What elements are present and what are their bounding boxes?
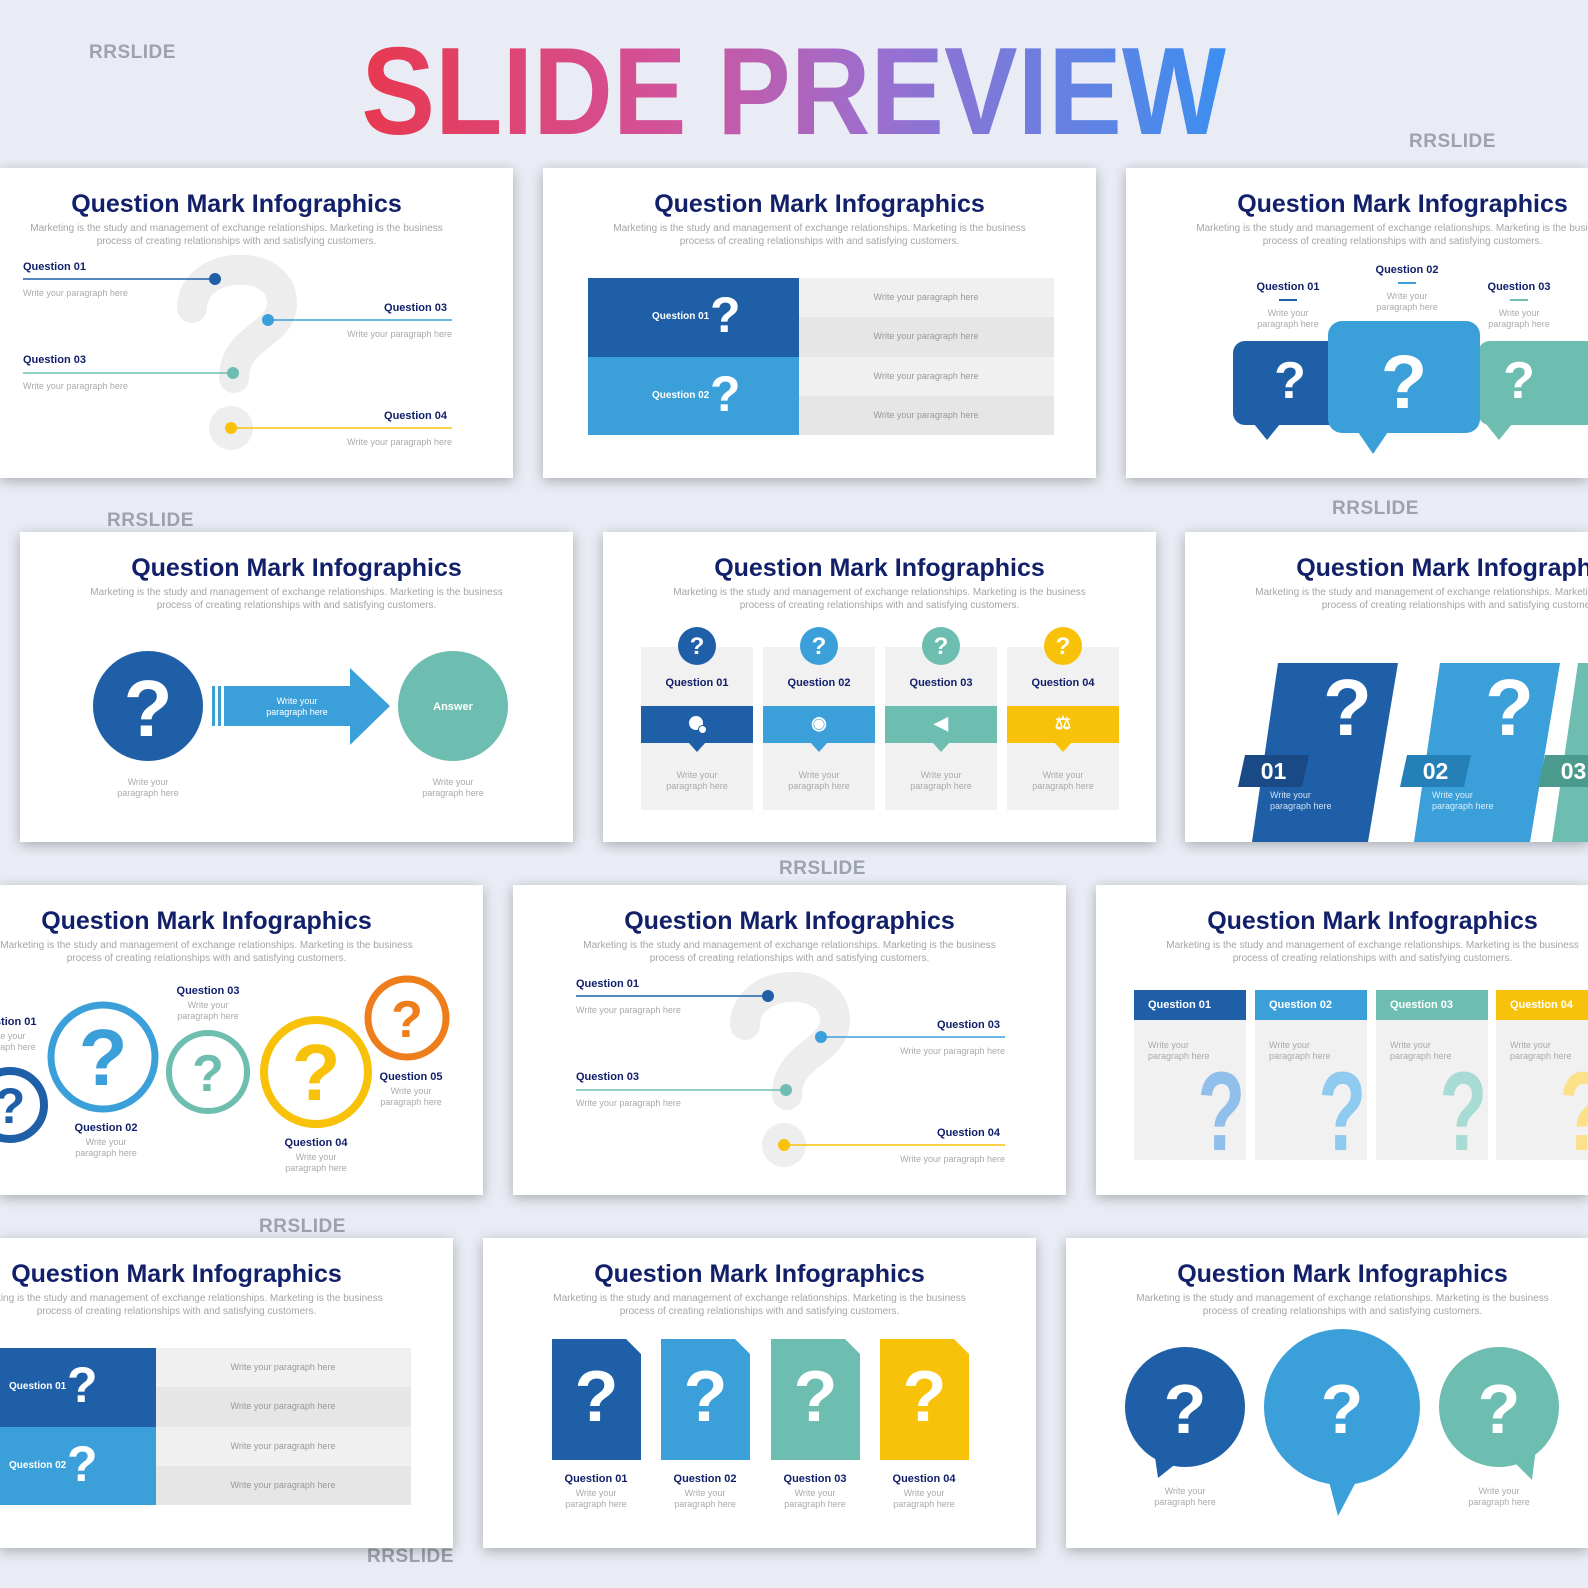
bar 01: ?: [1323, 663, 1372, 752]
panel: slide 3 speech boxes: paragraph here: [1488, 319, 1550, 329]
panel: slide 7 rings: Marketing is the study and management of exchange relationships. Marketing is the business: [0, 940, 413, 951]
panel: slide 9 header columns: Question Mark Infographics: [1207, 907, 1538, 935]
panel: slide 1 question lines: Question 03: [23, 354, 86, 366]
doc 3: ?: [794, 1357, 837, 1437]
column 3: Question 03: [1390, 999, 1453, 1011]
column 2: paragraph here: [788, 781, 850, 791]
panel: slide 7 rings: paragraph here: [75, 1148, 137, 1158]
column 1: ?: [690, 633, 704, 660]
watermark: RRSLIDE: [1332, 498, 1419, 519]
doc 3: paragraph here: [784, 1499, 846, 1509]
column 3: Write your: [1390, 1040, 1431, 1050]
panel: slide 7 rings: [0, 885, 483, 1195]
panel: slide 4 arrow answer: [20, 532, 573, 842]
column 4: Write your: [1043, 770, 1083, 780]
watermark: RRSLIDE: [259, 1216, 346, 1237]
icon: round speech bubbles: ?: [1164, 1370, 1206, 1448]
panel: slide 7 rings: paragraph here: [285, 1163, 347, 1173]
panel: slide 8 question lines: Question 04: [937, 1127, 1000, 1139]
watermark: RRSLIDE: [89, 42, 176, 63]
table: ?: [67, 1436, 98, 1492]
column 2: Question 02: [1269, 999, 1332, 1011]
panel: slide 12 round bubbles: Marketing is the study and management of exchange relationships. Marketing is the business: [1136, 1293, 1549, 1304]
panel: slide 1 question lines: Write your paragraph here: [23, 381, 128, 391]
chart: question arrow answer: Answer: [433, 701, 474, 713]
table: Write your paragraph here: [874, 371, 978, 381]
column 3: paragraph here: [1390, 1051, 1452, 1061]
panel: slide 1 question lines: Question 01: [23, 261, 86, 273]
panel: slide 1 question lines: Question 04: [384, 410, 447, 422]
doc 1: Write your: [576, 1488, 616, 1498]
bar 03: 03: [1561, 758, 1586, 784]
icon: round speech bubbles: ?: [1321, 1370, 1363, 1448]
chart: rings: ?: [391, 991, 423, 1049]
chart: question arrow answer: ?: [124, 664, 172, 753]
panel: slide 5 four columns: [603, 532, 1156, 842]
panel: slide 7 rings: process of creating relationships with and satisfying customers.: [67, 952, 346, 964]
column 3: ?: [934, 633, 948, 660]
table: Write your paragraph here: [874, 292, 978, 302]
panel: slide 10 table: [0, 1238, 453, 1548]
panel: slide 7 rings: paragraph here: [177, 1011, 239, 1021]
column 1: paragraph here: [666, 781, 728, 791]
panel: slide 1 question lines: Question 03: [384, 302, 447, 314]
bar 02: paragraph here: [1432, 801, 1494, 811]
column 3: Write your: [921, 770, 961, 780]
panel: slide 8 question lines: Write your paragraph here: [576, 1098, 681, 1108]
chart: rings: ?: [79, 1013, 127, 1102]
table: ?: [710, 287, 741, 343]
table: Question 01: [652, 311, 709, 322]
panel: slide 8 question lines: Question 03: [937, 1019, 1000, 1031]
watermark: RRSLIDE: [779, 858, 866, 879]
panel: slide 1 question lines: process of creating relationships with and satisfying customers.: [97, 236, 376, 246]
doc 3: Write your: [795, 1488, 835, 1498]
column 4: ⚖: [1055, 713, 1071, 733]
panel: slide 4 arrow answer: Marketing is the study and management of exchange relationships. Marketing is the business: [90, 587, 503, 598]
panel: slide 11 documents: [483, 1238, 1036, 1548]
panel: slide 5 four columns: Question Mark Infographics: [714, 554, 1045, 582]
chart: question arrow answer: [93, 651, 508, 761]
panel: slide 3 speech boxes: Write your: [1268, 308, 1308, 318]
icon: speech bubbles: ?: [1381, 340, 1427, 425]
column 2: [763, 627, 875, 810]
panel: slide 3 speech boxes: paragraph here: [1376, 302, 1438, 312]
chart: rings: ?: [192, 1045, 224, 1103]
doc 1: [552, 1339, 641, 1509]
watermark: RRSLIDE: [107, 510, 194, 531]
panel: slide 7 rings: Write your: [86, 1137, 126, 1147]
panel: slide 7 rings: Question 03: [177, 985, 239, 997]
panel: slide 12 round bubbles: paragraph here: [1468, 1497, 1530, 1507]
panel: slide 1 question lines: Write your paragraph here: [347, 437, 452, 447]
doc 2: ?: [684, 1357, 727, 1437]
panel: slide 4 arrow answer: paragraph here: [117, 788, 179, 798]
panel: slide 3 speech boxes: Question 02: [1376, 264, 1438, 276]
chart: rings: ?: [292, 1028, 340, 1117]
table: Question 01: [9, 1381, 66, 1392]
doc 3: Question 03: [784, 1473, 846, 1485]
bar 03: [1538, 663, 1588, 842]
panel: slide 3 speech boxes: Write your: [1499, 308, 1539, 318]
panel: slide 7 rings: paragraph here: [380, 1097, 442, 1107]
column 2: Question 02: [788, 677, 850, 689]
icon: speech bubbles: [1233, 321, 1588, 454]
doc 2: Question 02: [674, 1473, 736, 1485]
panel: slide 6 slanted bars: [1185, 532, 1588, 842]
bar 01: [1238, 663, 1398, 842]
panel: slide 9 header columns: Marketing is the study and management of exchange relationships. Marketing is the business: [1166, 940, 1579, 951]
chart: question arrow answer: paragraph here: [266, 707, 328, 717]
doc 1: ?: [574, 1357, 618, 1437]
panel: slide 1 question lines: Marketing is the study and management of exchange relationships. Marketing is the business: [30, 223, 443, 234]
icon: round speech bubbles: ?: [1478, 1370, 1520, 1448]
column 4: Question 04: [1032, 677, 1094, 689]
column 4: Question 04: [1510, 999, 1573, 1011]
column 3: [885, 627, 997, 810]
panel: slide 4 arrow answer: process of creating relationships with and satisfying customers.: [157, 600, 436, 610]
doc 2: paragraph here: [674, 1499, 736, 1509]
panel: slide 9 header columns: [1096, 885, 1588, 1195]
panel: slide 8 question lines: Marketing is the study and management of exchange relationships. Marketing is the business: [583, 940, 996, 951]
table: [588, 278, 1054, 435]
column 3: paragraph here: [910, 781, 972, 791]
table: ?: [67, 1357, 98, 1413]
table: Write your paragraph here: [231, 1480, 335, 1490]
column 4: [1496, 990, 1588, 1160]
bar 01: Write your: [1270, 790, 1311, 800]
panel: slide 4 arrow answer: Write your: [433, 777, 473, 787]
panel: slide 8 question lines: process of creating relationships with and satisfying customers.: [650, 952, 929, 964]
doc 4: paragraph here: [893, 1499, 955, 1509]
panel: slide 8 question lines: Question Mark Infographics: [624, 907, 955, 935]
doc 4: ?: [902, 1357, 946, 1437]
watermark: RRSLIDE: [367, 1546, 454, 1567]
panel: slide 7 rings: Question 05: [380, 1071, 442, 1083]
column 3: ◀: [934, 713, 948, 733]
icon: speech bubbles: ?: [1503, 352, 1535, 410]
column 1: paragraph here: [1148, 1051, 1210, 1061]
panel: slide 8 question lines: Write your paragraph here: [900, 1046, 1005, 1056]
table: Question 02: [9, 1460, 66, 1471]
panel: slide 8 question lines: Write your paragraph here: [900, 1154, 1005, 1164]
table: Write your paragraph here: [874, 331, 978, 341]
panel: slide 8 question lines: Question 01: [576, 978, 639, 990]
panel: slide 3 speech boxes: Write your: [1387, 291, 1427, 301]
column 1: [1134, 990, 1246, 1160]
bar 02: ?: [1485, 663, 1534, 752]
watermark: RRSLIDE: [1409, 131, 1496, 152]
panel: slide 8 question lines: Write your paragraph here: [576, 1005, 681, 1015]
table: Write your paragraph here: [231, 1401, 335, 1411]
doc 2: Write your: [685, 1488, 725, 1498]
panel: slide 4 arrow answer: Question Mark Infographics: [131, 554, 462, 582]
panel: slide 7 rings: Question 04: [285, 1137, 347, 1149]
panel: slide 8 question lines: Question 03: [576, 1071, 639, 1083]
panel: slide 12 round bubbles: Question Mark Infographics: [1177, 1260, 1508, 1288]
column 2: Write your: [1269, 1040, 1310, 1050]
panel: slide 1 question lines: Write your paragraph here: [23, 288, 128, 298]
column 1: Write your: [677, 770, 717, 780]
chart: question arrow answer: Write your: [277, 696, 317, 706]
panel: slide 2 table: Marketing is the study and management of exchange relationships. Marketing is the business: [613, 223, 1026, 234]
panel: slide 8 question lines: [513, 885, 1066, 1195]
panel: slide 2 table: process of creating relationships with and satisfying customers.: [680, 236, 959, 246]
column 1: Question 01: [666, 677, 728, 689]
table: [0, 1348, 411, 1505]
chart: rings: [0, 976, 450, 1143]
column 4: paragraph here: [1510, 1051, 1572, 1061]
panel: slide 3 speech boxes: Question 03: [1488, 281, 1550, 293]
panel: slide 7 rings: Write your: [296, 1152, 336, 1162]
panel: slide 5 four columns: process of creating relationships with and satisfying customers.: [740, 600, 1019, 610]
panel: slide 3 speech boxes: Question 01: [1257, 281, 1319, 293]
column 2: paragraph here: [1269, 1051, 1331, 1061]
panel: slide 9 header columns: process of creating relationships with and satisfying customers.: [1233, 952, 1512, 964]
column 4: Write your: [1510, 1040, 1551, 1050]
column 3: Question 03: [910, 677, 972, 689]
icon: round speech bubbles: [1125, 1329, 1559, 1516]
panel: slide 12 round bubbles: paragraph here: [1154, 1497, 1216, 1507]
doc 4: Write your: [904, 1488, 944, 1498]
panel: slide 3 speech boxes: paragraph here: [1257, 319, 1319, 329]
panel: slide 12 round bubbles: [1066, 1238, 1588, 1548]
doc 1: Question 01: [565, 1473, 627, 1485]
panel: slide 1 question lines: [0, 168, 513, 478]
panel: slide 3 speech boxes: [1126, 168, 1588, 478]
table: Question 02: [652, 390, 709, 401]
bar 02: Write your: [1432, 790, 1473, 800]
panel: slide 4 arrow answer: paragraph here: [422, 788, 484, 798]
column 2: ◉: [811, 713, 827, 733]
panel: slide 12 round bubbles: Write your: [1479, 1486, 1519, 1496]
chart: question lines: [576, 972, 1005, 1167]
column 2: ?: [812, 633, 826, 660]
bar 01: paragraph here: [1270, 801, 1332, 811]
panel: slide 7 rings: Question Mark Infographics: [41, 907, 372, 935]
doc 1: paragraph here: [565, 1499, 627, 1509]
column 3: [1376, 990, 1488, 1160]
panel: slide 2 table: [543, 168, 1096, 478]
column 4: paragraph here: [1032, 781, 1094, 791]
panel: slide 1 question lines: Write your paragraph here: [347, 329, 452, 339]
panel: slide 7 rings: Question 02: [75, 1122, 137, 1134]
panel: slide 10 table: Question Mark Infographics: [11, 1260, 342, 1288]
panel: slide 4 arrow answer: Write your: [128, 777, 168, 787]
column 1: Write your: [1148, 1040, 1189, 1050]
doc 4: Question 04: [893, 1473, 955, 1485]
doc 4: [880, 1339, 969, 1509]
panel: slide 11 documents: Question Mark Infographics: [594, 1260, 925, 1288]
panel: slide 7 rings: Write your: [391, 1086, 431, 1096]
column 4: [1007, 627, 1119, 810]
column 1: Question 01: [1148, 999, 1211, 1011]
doc 2: [661, 1339, 750, 1509]
panel: slide 7 rings: Write your: [188, 1000, 228, 1010]
doc 3: [771, 1339, 860, 1509]
bar 01: 01: [1261, 758, 1286, 784]
panel: slide 12 round bubbles: Write your: [1165, 1486, 1205, 1496]
column 4: ?: [1056, 633, 1070, 660]
column 2: [1255, 990, 1367, 1160]
panel: slide 11 documents: Marketing is the study and management of exchange relationships. Marketing is the business: [553, 1293, 966, 1304]
chart: question lines: [23, 254, 452, 450]
table: Write your paragraph here: [231, 1362, 335, 1372]
panel: slide 3 speech boxes: Question Mark Infographics: [1237, 190, 1568, 218]
panel: slide 10 table: process of creating relationships with and satisfying customers.: [37, 1306, 316, 1316]
column 1: [641, 627, 753, 810]
panel: slide 12 round bubbles: process of creating relationships with and satisfying customers.: [1203, 1306, 1482, 1316]
table: ?: [710, 366, 741, 422]
column 2: Write your: [799, 770, 839, 780]
panel: slide 1 question lines: Question Mark Infographics: [71, 190, 402, 218]
table: Write your paragraph here: [874, 410, 978, 420]
panel: slide 2 table: Question Mark Infographics: [654, 190, 985, 218]
icon: speech bubbles: ?: [1274, 352, 1306, 410]
panel: slide 5 four columns: Marketing is the study and management of exchange relationships. Marketing is the business: [673, 587, 1086, 598]
bar 02: 02: [1423, 758, 1448, 784]
bar 02: [1400, 663, 1560, 842]
panel: slide 11 documents: process of creating relationships with and satisfying customers.: [620, 1306, 899, 1316]
panel: slide 3 speech boxes: process of creating relationships with and satisfying customers.: [1263, 236, 1542, 246]
table: Write your paragraph here: [231, 1441, 335, 1451]
